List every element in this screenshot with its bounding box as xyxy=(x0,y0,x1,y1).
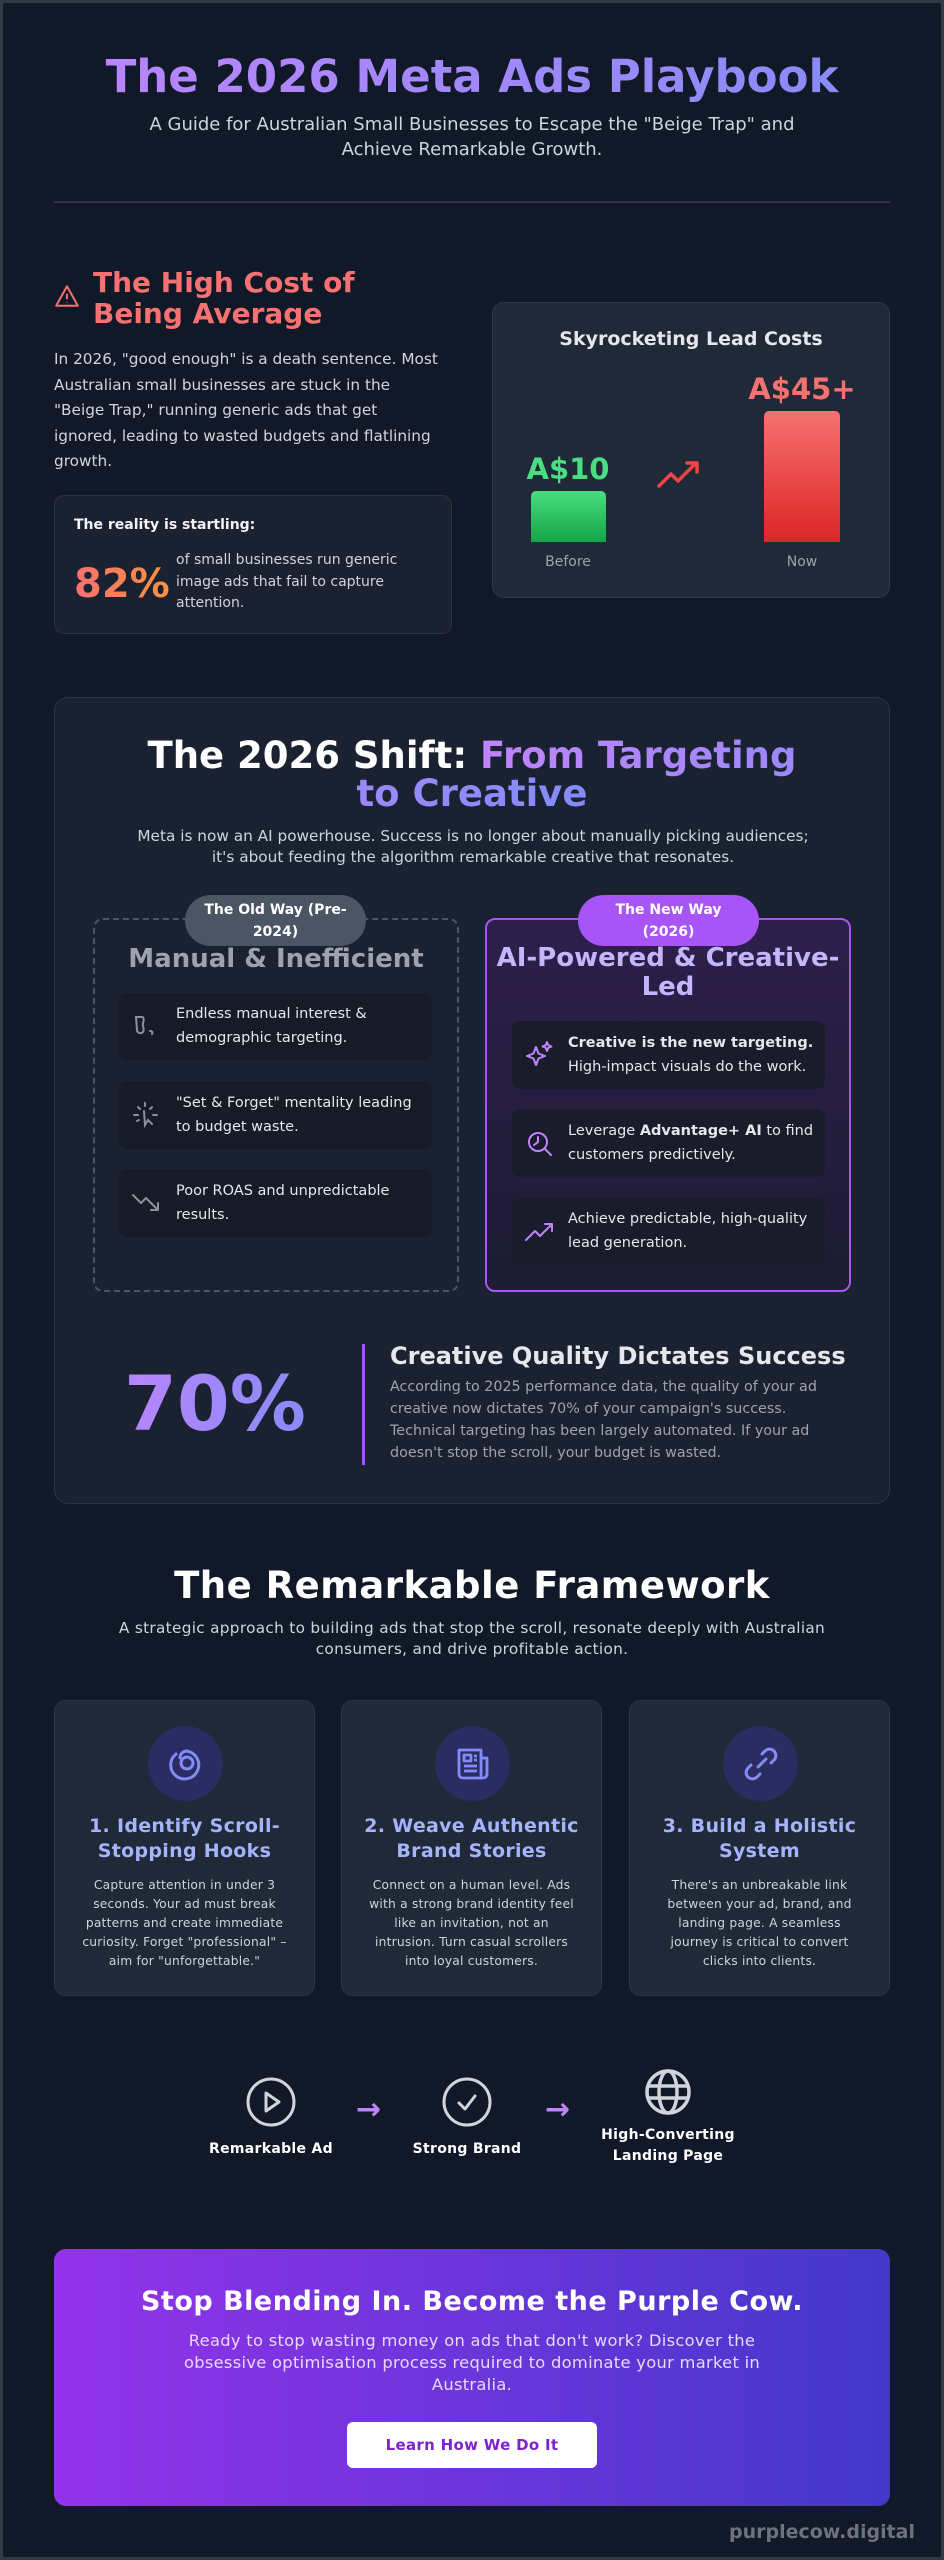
panel: 2026 shift xyxy=(54,697,890,1504)
card: holistic system: 3. Build a Holistic xyxy=(663,1815,856,1837)
heading: high cost: Being Average xyxy=(93,297,322,330)
item: poor roas: Poor ROAS and unpredictable xyxy=(176,1183,389,1199)
item: advantage ai: Leverage Advantage+ AI to find xyxy=(568,1123,813,1139)
card: hooks xyxy=(54,1700,315,1996)
item: creative targeting xyxy=(512,1021,825,1089)
card: brand stories: like an invitation, not an xyxy=(394,1916,549,1930)
panel: reality stat: The reality is startling: xyxy=(74,517,255,533)
text: Manual & Inefficient xyxy=(128,944,424,974)
flow: landing page: Landing Page xyxy=(613,2148,723,2164)
button: Learn How We Do It xyxy=(386,2436,558,2454)
panel: old way xyxy=(93,918,459,1292)
text: creative quality: Creative Quality Dictates Success xyxy=(390,1342,846,1370)
card: holistic system: journey is critical to convert xyxy=(670,1935,848,1949)
title: The 2026 Meta Ads Playbook xyxy=(106,50,838,103)
item: manual targeting: demographic targeting. xyxy=(176,1030,347,1046)
item: manual targeting xyxy=(119,993,432,1060)
card: holistic system xyxy=(629,1700,890,1996)
text: AI-Powered & Creative- xyxy=(497,943,839,973)
card: brand stories: Connect on a human level. Ads xyxy=(373,1878,570,1892)
flow: landing page xyxy=(601,2069,735,2164)
arrow: → xyxy=(356,2092,381,2127)
chart: lead costs: Now xyxy=(787,554,817,570)
text: intro paragraph xyxy=(54,350,438,470)
heading: high cost: The High Cost of xyxy=(93,266,355,299)
chart: lead costs: Before xyxy=(545,554,591,570)
card: hooks: seconds. Your ad must break xyxy=(93,1897,276,1911)
heading: shift xyxy=(147,734,797,815)
chart: lead costs: A$45+ xyxy=(748,372,856,406)
text: A strategic approach to building ads that stop the scroll, resonate deeply with Australian xyxy=(119,1619,825,1637)
panel: reality stat: attention. xyxy=(176,595,244,611)
panel: cta: Australia. xyxy=(432,2375,512,2394)
text: intro paragraph: growth. xyxy=(54,452,112,470)
text: Led xyxy=(642,972,694,1002)
chart: lead costs: A$10 xyxy=(526,452,609,486)
heading: shift: The 2026 Shift: From Targeting xyxy=(147,734,797,777)
card: holistic system: There's an unbreakable link xyxy=(672,1878,847,1892)
flow: remarkable ad xyxy=(209,2078,333,2157)
card: hooks: aim for "unforgettable." xyxy=(109,1954,260,1968)
heading: high cost xyxy=(93,266,355,330)
item: creative targeting: High-impact visuals do the work. xyxy=(568,1059,806,1075)
panel: new way xyxy=(485,918,851,1292)
card: holistic system: clicks into clients. xyxy=(703,1954,816,1968)
badge: old way xyxy=(185,895,366,946)
arrow: → xyxy=(545,2092,570,2127)
panel: reality stat: of small businesses run generic xyxy=(176,552,397,568)
card: holistic system: landing page. A seamless xyxy=(678,1916,841,1930)
badge: new way: The New Way xyxy=(616,902,722,918)
text: intro paragraph: In 2026, "good enough" is a death sentence. Most xyxy=(54,350,438,368)
flow: strong brand xyxy=(413,2078,521,2157)
text: creative quality: According to 2025 performance data, the quality of your ad xyxy=(390,1379,817,1395)
item: poor roas: results. xyxy=(176,1207,229,1223)
panel: reality stat xyxy=(54,495,452,634)
badge: old way: 2024) xyxy=(253,924,298,940)
card: holistic system: between your ad, brand, and xyxy=(667,1897,852,1911)
text: intro paragraph: "Beige Trap," running generic ads that get xyxy=(54,401,377,419)
card: holistic system: System xyxy=(719,1840,800,1862)
chart: lead costs: Skyrocketing Lead Costs xyxy=(559,328,823,350)
flow: strong brand: Strong Brand xyxy=(413,2141,521,2157)
flow: remarkable ad: Remarkable Ad xyxy=(209,2141,333,2157)
item: predictable leads xyxy=(512,1198,825,1265)
heading: shift: to Creative xyxy=(356,772,588,815)
item: predictable leads: lead generation. xyxy=(568,1235,687,1251)
item: advantage ai xyxy=(512,1109,825,1177)
card: brand stories: 2. Weave Authentic xyxy=(364,1815,579,1837)
panel: cta xyxy=(54,2249,890,2506)
panel: reality stat: image ads that fail to capture xyxy=(176,574,384,590)
card: hooks: Stopping Hooks xyxy=(98,1840,271,1862)
item: set and forget: to budget waste. xyxy=(176,1119,299,1135)
icon: warning xyxy=(55,285,79,307)
card: brand stories: intrusion. Turn casual scrollers xyxy=(375,1935,568,1949)
item: manual targeting: Endless manual interest & xyxy=(176,1006,367,1022)
footer: purplecow.digital xyxy=(729,2521,915,2543)
card: hooks: Capture attention in under 3 xyxy=(94,1878,275,1892)
card: brand stories: into loyal customers. xyxy=(405,1954,538,1968)
stat: 82%: 82% xyxy=(74,561,170,607)
card: hooks: 1. Identify Scroll- xyxy=(89,1815,280,1837)
card: brand stories xyxy=(341,1700,602,1996)
panel: cta: Stop Blending In. Become the Purple Cow. xyxy=(141,2286,803,2317)
badge: new way: (2026) xyxy=(643,924,694,940)
item: set and forget: "Set & Forget" mentality leading xyxy=(176,1095,412,1111)
item: set and forget xyxy=(119,1081,432,1149)
text: consumers, and drive profitable action. xyxy=(316,1640,628,1658)
badge: new way xyxy=(578,895,759,946)
text: creative quality xyxy=(390,1342,846,1461)
icon: trend up xyxy=(657,461,699,488)
panel: cta: Ready to stop wasting money on ads that don't work? Discover the xyxy=(189,2331,755,2350)
stat: 70%: 70% xyxy=(124,1359,306,1448)
chart: lead costs xyxy=(492,302,890,598)
item: creative targeting: Creative is the new targeting. xyxy=(568,1035,813,1051)
badge: old way: The Old Way (Pre- xyxy=(204,902,347,918)
item: poor roas xyxy=(119,1169,432,1237)
panel: 2026 shift: Meta is now an AI powerhouse. Success is no longer about manually picking audiences; xyxy=(137,827,809,845)
card: brand stories: with a strong brand identity feel xyxy=(369,1897,574,1911)
card: hooks: curiosity. Forget "professional" – xyxy=(82,1935,287,1949)
item: advantage ai: customers predictively. xyxy=(568,1147,736,1163)
card: brand stories: Brand Stories xyxy=(396,1840,547,1862)
text: creative quality: doesn't stop the scroll, your budget is wasted. xyxy=(390,1445,721,1461)
panel: cta: obsessive optimisation process required to dominate your market in xyxy=(184,2353,760,2372)
text: creative quality: creative now dictates 70% of your campaign's success. xyxy=(390,1401,786,1417)
button xyxy=(347,2422,597,2468)
subtitle: A Guide for Australian Small Businesses to Escape the "Beige Trap" and Achieve Remarkable Growth. xyxy=(149,114,795,160)
heading: framework: The Remarkable Framework xyxy=(174,1564,770,1607)
text: intro paragraph: ignored, leading to wasted budgets and flatlining xyxy=(54,426,431,444)
panel: 2026 shift: it's about feeding the algorithm remarkable creative that resonates. xyxy=(212,848,734,866)
text: intro paragraph: Australian small businesses are stuck in the xyxy=(54,376,390,394)
flow: landing page: High-Converting xyxy=(601,2127,735,2143)
text: creative quality: Technical targeting has been largely automated. If your ad xyxy=(390,1423,809,1439)
card: hooks: patterns and create immediate xyxy=(86,1916,283,1930)
item: predictable leads: Achieve predictable, high-quality xyxy=(568,1211,807,1227)
